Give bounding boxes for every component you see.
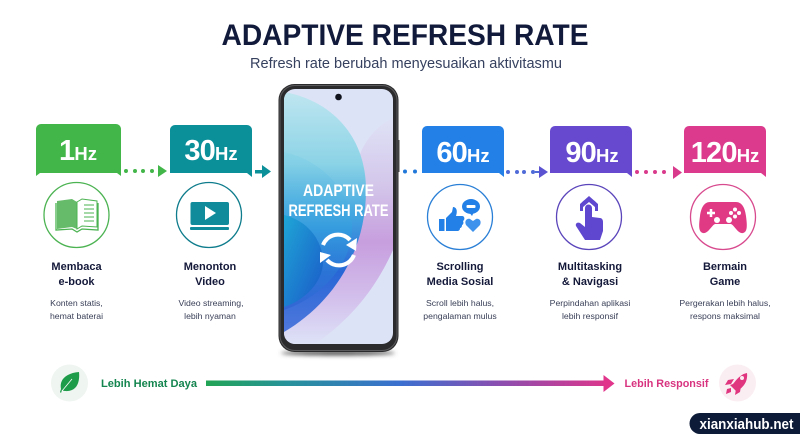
description: Scroll lebih halus,: [426, 298, 494, 308]
badge: 1Hz: 1Hz: [59, 135, 97, 167]
phone screen: [284, 89, 393, 344]
arrow: 1Hz to 30Hz: [124, 165, 167, 177]
panel: 1Hz: e-book: [58, 276, 95, 288]
badge: 120Hz: [684, 126, 766, 177]
panel: 120Hz: [679, 126, 771, 321]
arrow: phone to 60Hz: [403, 170, 417, 174]
badge: 60Hz: 60Hz: [436, 137, 490, 169]
icon: gamepad: [690, 184, 756, 250]
panel: 30Hz: Video: [195, 276, 225, 288]
title: ADAPTIVE REFRESH RATE: [222, 19, 588, 52]
label: Bermain: [703, 261, 747, 273]
label: Menonton: [184, 261, 237, 273]
arrow: 90Hz to 120Hz: [635, 166, 682, 179]
description: Perpindahan aplikasi: [550, 298, 630, 308]
camera: [335, 94, 342, 100]
panel: 60Hz: pengalaman mulus: [423, 311, 497, 321]
arrow: 30Hz to phone: [255, 165, 271, 178]
badge: 30Hz: [170, 125, 252, 177]
icon: social: [428, 184, 492, 250]
icon: rocket: [719, 364, 756, 402]
badge: 1Hz: [36, 124, 121, 176]
badge: 90Hz: [550, 126, 632, 177]
panel: 30Hz: [170, 125, 252, 321]
arrow: 60Hz to 90Hz: [506, 166, 548, 178]
icon: sync: [320, 235, 357, 265]
gradient arrow: [206, 375, 614, 392]
panel: 90Hz: [550, 126, 632, 321]
icon: video: [176, 182, 242, 248]
panel: 1Hz: [36, 124, 121, 321]
label: lebih hemat daya: Lebih Hemat Daya: [101, 378, 198, 390]
description: Pergerakan lebih halus,: [679, 298, 771, 308]
phone: REFRESH RATE: [288, 201, 388, 220]
badge: 60Hz: [422, 126, 504, 177]
description: Video streaming,: [178, 298, 244, 308]
label: lebih responsif: Lebih Responsif: [624, 378, 709, 390]
label: Membaca: [51, 261, 102, 273]
label: Scrolling: [436, 261, 484, 273]
label: Multitasking: [558, 261, 622, 273]
panel: 60Hz: Media Sosial: [427, 276, 493, 288]
panel: 1Hz: hemat baterai: [50, 311, 103, 321]
panel: 120Hz: Game: [710, 276, 740, 288]
phone heading: ADAPTIVE: [303, 181, 374, 200]
icon: leaf: [51, 364, 88, 402]
panel: 90Hz: & Navigasi: [562, 276, 618, 288]
description: Konten statis,: [50, 298, 103, 308]
icon: touch: [556, 184, 622, 250]
panel: 60Hz: [422, 126, 504, 321]
badge: 90Hz: 90Hz: [565, 137, 619, 169]
badge: 120Hz: 120Hz: [691, 137, 759, 169]
panel: 30Hz: lebih nyaman: [184, 311, 236, 321]
badge: 30Hz: 30Hz: [184, 135, 238, 167]
panel: 90Hz: lebih responsif: [562, 311, 619, 321]
panel: 120Hz: respons maksimal: [690, 311, 760, 321]
subtitle: Refresh rate berubah menyesuaikan aktivitasmu: [250, 56, 562, 72]
icon: book: [44, 182, 109, 248]
phone: [278, 84, 400, 356]
